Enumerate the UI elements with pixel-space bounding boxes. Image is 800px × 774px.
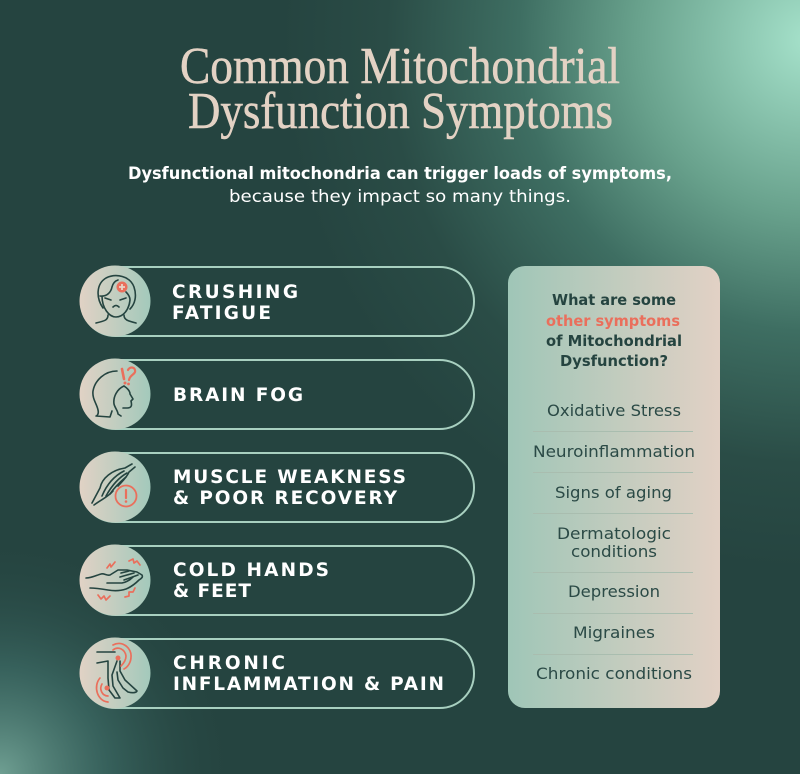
panel heading: Dysfunction? bbox=[560, 352, 668, 370]
panel heading: What are some bbox=[552, 291, 676, 309]
icon: fatigued face bbox=[96, 276, 136, 323]
label: & FEET bbox=[173, 581, 251, 602]
panel heading: other symptoms bbox=[546, 312, 680, 330]
subtitle: because they impact so many things. bbox=[229, 187, 571, 207]
label bbox=[173, 560, 329, 602]
icon: legs with pain marks bbox=[97, 643, 137, 702]
symptom list: Neuroinflammation bbox=[533, 442, 695, 461]
title: Common Mitochondrial bbox=[180, 38, 620, 95]
symptom list: Signs of aging bbox=[555, 483, 672, 502]
symptom: cold hands bbox=[80, 544, 474, 616]
icon: hand with tingles bbox=[86, 559, 142, 600]
symptom: brain fog bbox=[80, 358, 474, 430]
panel heading: of Mitochondrial bbox=[546, 332, 682, 350]
symptom list: Oxidative Stress bbox=[547, 401, 681, 420]
label: BRAIN FOG bbox=[173, 385, 303, 406]
symptom: crushing fatigue bbox=[80, 266, 474, 336]
icon: muscle with alert bbox=[92, 464, 136, 506]
subtitle: Dysfunctional mitochondria can trigger loads of symptoms, bbox=[128, 164, 672, 184]
label bbox=[173, 653, 444, 695]
symptom list: Depression bbox=[568, 582, 660, 601]
label: FATIGUE bbox=[172, 303, 271, 324]
subtitle bbox=[128, 164, 672, 207]
label: COLD HANDS bbox=[173, 560, 329, 581]
label: CHRONIC bbox=[173, 653, 285, 674]
symptom list: Chronic conditions bbox=[536, 664, 692, 683]
label: MUSCLE WEAKNESS bbox=[173, 467, 406, 488]
label bbox=[173, 467, 406, 509]
panel: other symptoms bbox=[508, 266, 720, 708]
title bbox=[180, 38, 620, 140]
panel heading bbox=[546, 291, 682, 370]
symptom: muscle weakness bbox=[80, 452, 474, 522]
icon: head with question marks bbox=[93, 368, 135, 417]
label bbox=[172, 282, 298, 324]
symptom list: conditions bbox=[571, 542, 657, 561]
symptom: chronic inflammation bbox=[80, 638, 474, 708]
symptom list: Dermatologic bbox=[557, 524, 671, 543]
title: Dysfunction Symptoms bbox=[188, 83, 613, 140]
label: & POOR RECOVERY bbox=[173, 488, 398, 509]
symptom list: Migraines bbox=[573, 623, 655, 642]
symptom list bbox=[533, 401, 695, 683]
label: CRUSHING bbox=[172, 282, 298, 303]
label: INFLAMMATION & PAIN bbox=[173, 674, 444, 695]
